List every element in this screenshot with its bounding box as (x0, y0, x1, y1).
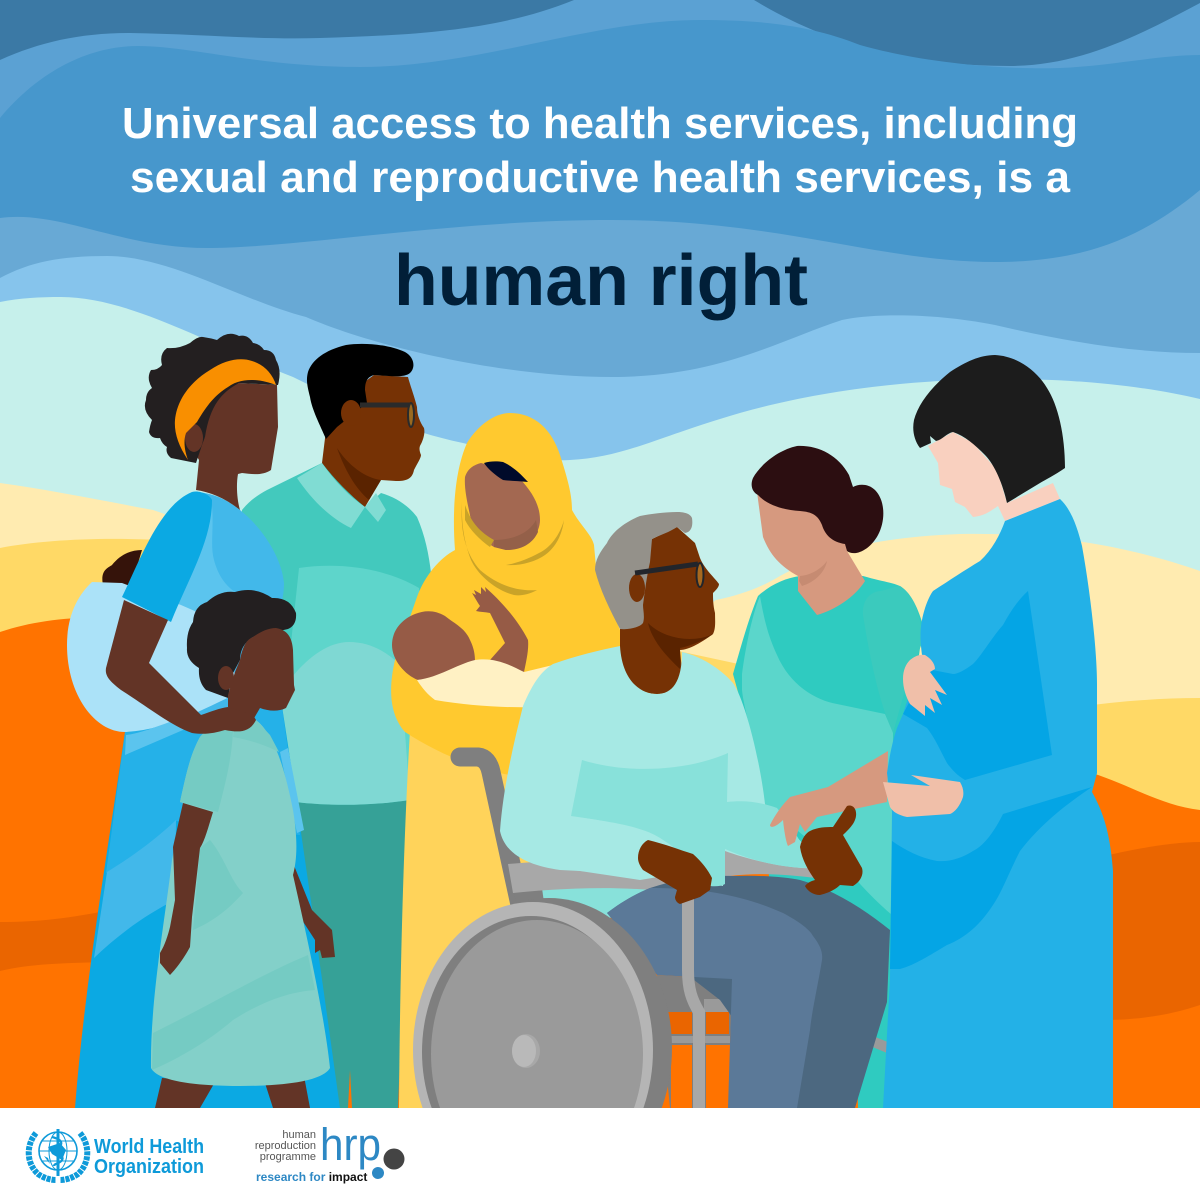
bodice mid (175, 505, 235, 640)
dress wedge (94, 820, 176, 958)
front tube (688, 895, 699, 1108)
neck shadow (799, 561, 827, 586)
dress mid tone (106, 700, 300, 873)
tunic (733, 576, 923, 1108)
neck and head (620, 527, 719, 694)
wheel hub (512, 1034, 540, 1068)
hair (913, 355, 1065, 503)
shoulder shade (233, 720, 279, 752)
ear (185, 424, 203, 452)
face and neck (928, 432, 1060, 521)
figure: woman with headband and baby on back (67, 334, 340, 1108)
trousers (295, 800, 410, 1108)
dress darker skirt (890, 787, 1092, 969)
hair (307, 344, 413, 439)
trousers back (607, 876, 890, 1108)
neck and face (190, 383, 278, 510)
drape shade (193, 840, 243, 930)
left hand (638, 840, 712, 904)
hair (145, 334, 280, 463)
figure: woman in yellow hijab with baby (391, 413, 625, 1108)
right arm (292, 863, 335, 958)
upper hand (903, 655, 947, 716)
trousers front (607, 888, 822, 1108)
neck shadow (648, 623, 713, 669)
sweater mid panel (285, 566, 425, 802)
footer band (0, 1108, 1200, 1200)
lower hand (883, 775, 963, 817)
dress right strip (280, 748, 304, 833)
logo: Organization wordmark: Organization (94, 1156, 204, 1178)
logo: hrp small text: programme (260, 1151, 316, 1163)
baby head (102, 550, 142, 590)
face (465, 463, 540, 550)
nurse arm (770, 751, 888, 846)
dress darker bodice (903, 591, 1052, 780)
dark hair under scarf (484, 461, 528, 482)
dress (883, 499, 1113, 1108)
logo: hrp letters: hrp (320, 1119, 381, 1170)
logo: WHO emblem (29, 1129, 87, 1180)
sleeve (863, 586, 923, 733)
neck and face (322, 375, 424, 507)
sweater lower panel (280, 642, 410, 805)
figure: nurse in teal (733, 446, 923, 1108)
orange gaps lower (671, 1045, 730, 1108)
logo: research for impact: research for impact (256, 1170, 367, 1184)
legs (155, 1076, 310, 1108)
bodice (126, 492, 284, 730)
skirt shade (152, 955, 315, 1070)
hijab and upper body (391, 413, 625, 775)
carrier fold (125, 716, 215, 755)
logo: hrp small text: human (282, 1129, 316, 1141)
sleeve shade (180, 725, 233, 812)
blanket (417, 659, 553, 707)
dress lower skirt (75, 700, 340, 1108)
neck and face (757, 492, 865, 615)
sweater shadow panel (571, 753, 812, 886)
logo: hrp small text: reproduction (255, 1140, 316, 1152)
figure: older man in wheelchair (413, 512, 890, 1198)
face shadow (494, 520, 538, 550)
ear (218, 666, 234, 690)
logo: World Health wordmark: World Health (94, 1136, 204, 1158)
baby arm (472, 587, 528, 672)
orange gaps upper (668, 1012, 729, 1034)
thumb-up hand (800, 805, 863, 895)
wheelchair frame (657, 975, 732, 1108)
woman's arm and hand on child's shoulder (106, 600, 256, 734)
figure: child in green dress (151, 590, 335, 1108)
frame crossbars (670, 999, 890, 1053)
scarf fold left (462, 502, 537, 595)
figure: pregnant woman in blue (883, 355, 1113, 1108)
sweater (240, 463, 431, 805)
figure: man in teal sweater (240, 344, 431, 1108)
sweater (500, 646, 818, 886)
seat post (513, 888, 545, 910)
hair (752, 446, 883, 553)
wheel rim (413, 902, 653, 1198)
dress (151, 720, 330, 1086)
face (228, 628, 295, 720)
tunic light panel (742, 596, 893, 915)
shirt collar (297, 463, 386, 528)
title: first line: Universal access to health services, including (122, 99, 1078, 148)
headband (175, 359, 276, 460)
logo: hrp small text (255, 1129, 316, 1163)
scarf fold right (506, 520, 564, 565)
ear (341, 400, 361, 426)
wheel back (426, 898, 672, 1198)
lower dress (399, 700, 535, 1108)
grey hair (595, 512, 692, 629)
ear (629, 574, 645, 602)
title: human right: human right (394, 241, 808, 321)
neck shadow (337, 448, 381, 500)
title: second line: sexual and reproductive health services, is a (130, 153, 1071, 202)
glasses (635, 563, 704, 587)
left arm (160, 803, 213, 975)
seat and armrest (508, 845, 817, 893)
sleeve (122, 492, 212, 622)
baby carrier (67, 582, 245, 732)
wheelchair handle and back tube (460, 757, 520, 905)
glasses (360, 403, 414, 427)
hair (187, 590, 296, 698)
sleeve return (560, 815, 700, 880)
logo: hrp dots (372, 1148, 404, 1179)
baby head (392, 611, 475, 680)
shirt back panel (535, 880, 690, 918)
wheel disc (431, 920, 643, 1188)
